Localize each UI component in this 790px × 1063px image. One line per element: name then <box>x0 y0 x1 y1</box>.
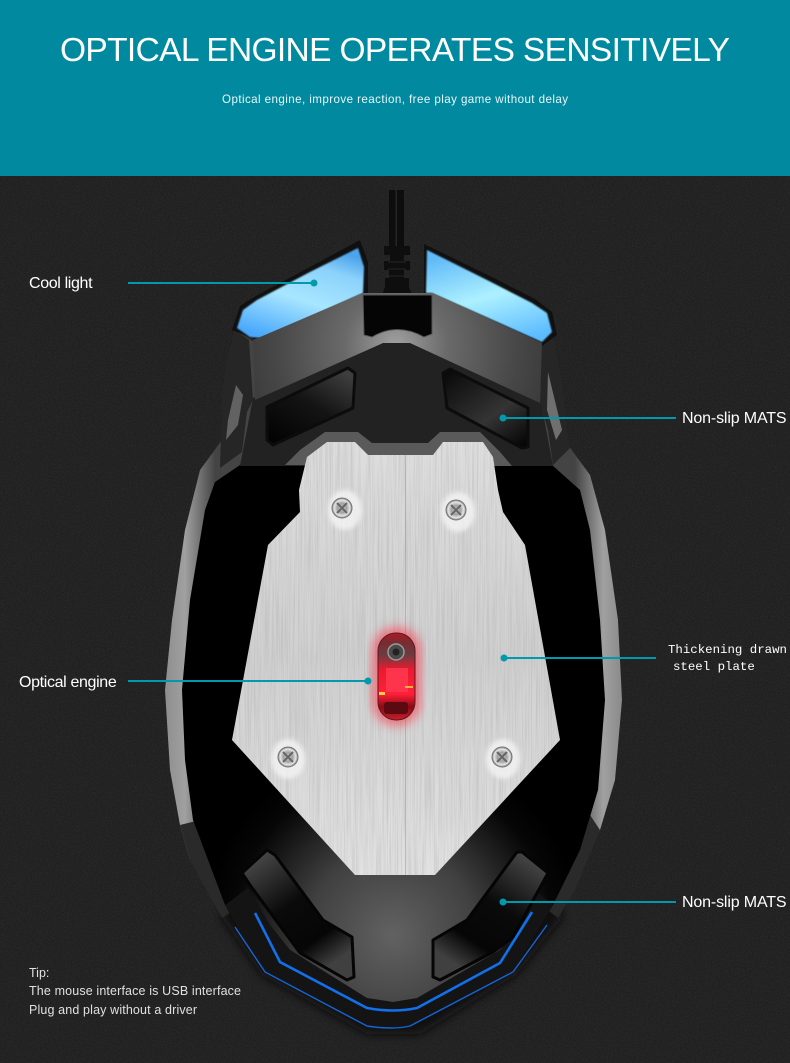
left upper side panel <box>220 330 253 468</box>
cable and strain relief <box>382 190 412 295</box>
callout: optical engine <box>19 674 372 691</box>
callout: cool light <box>29 275 318 292</box>
tip text block: Plug and play without a driver <box>29 1003 197 1017</box>
red optical sensor <box>372 627 421 726</box>
callout: non-slip mats bottom <box>500 894 786 911</box>
brushed steel plate <box>225 440 565 880</box>
upper left mat <box>267 368 355 445</box>
top dark panel <box>240 340 553 466</box>
callout: thickening drawn steel plate <box>500 643 787 674</box>
subtitle: Optical engine, improve reaction, free play game without delay <box>222 93 568 106</box>
lower left mat <box>242 850 354 980</box>
inner blue line <box>255 912 532 1010</box>
drop shadow under body <box>222 600 562 1034</box>
callout: thickening drawn steel plate: Thickening drawn <box>668 643 787 657</box>
lower right mat <box>433 852 548 980</box>
callout: non-slip mats top <box>500 410 786 427</box>
bottom trim <box>225 888 553 1028</box>
callout: thickening drawn steel plate: steel plate <box>673 660 755 674</box>
title: OPTICAL ENGINE OPERATES SENSITIVELY <box>60 32 730 69</box>
cable exit box <box>363 295 432 337</box>
mouse underside illustration <box>165 190 622 1034</box>
screw bottom right <box>486 739 520 779</box>
screw top left <box>328 490 362 530</box>
upper right mat <box>443 369 528 448</box>
upper blue light right <box>426 250 552 342</box>
black interior <box>182 465 605 1027</box>
right upper side panel <box>540 335 570 465</box>
callout: non-slip mats bottom: Non-slip MATS <box>682 894 786 911</box>
body silhouette with side grips <box>165 330 622 900</box>
tip text block <box>29 966 241 1017</box>
callout: non-slip mats top: Non-slip MATS <box>682 410 786 427</box>
lower edge grey rim <box>180 815 600 918</box>
outer blue line <box>235 925 547 1028</box>
grey ring around plate top <box>285 432 512 466</box>
tip text block: Tip: <box>29 966 49 980</box>
screw top right <box>441 492 475 532</box>
callout: cool light: Cool light <box>29 275 93 292</box>
header band <box>0 0 790 176</box>
tip text block: The mouse interface is USB interface <box>29 984 241 998</box>
dark backing behind lights <box>232 240 557 346</box>
callout: optical engine: Optical engine <box>19 674 117 691</box>
screw bottom left <box>271 739 305 779</box>
upper blue light left <box>237 248 364 338</box>
wing shell <box>253 293 542 403</box>
